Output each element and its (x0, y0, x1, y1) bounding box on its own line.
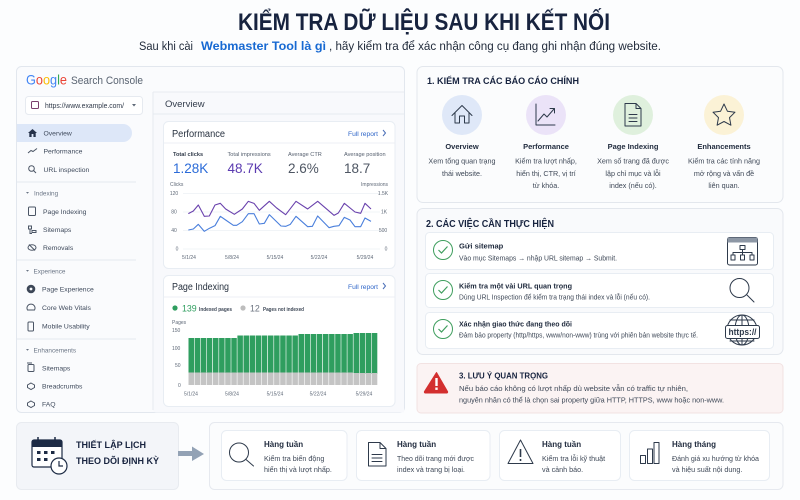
nav: sitemaps enhancement: Sitemaps (42, 366, 71, 372)
nav: URL inspection: URL inspection (44, 167, 90, 174)
property selector (26, 96, 142, 114)
nav: core web vitals (27, 304, 91, 312)
card: monthly trends: Đánh giá xu hướng từ khóa (672, 454, 759, 463)
item: overview: Overview (445, 142, 479, 151)
logo: Google Search Console (26, 72, 143, 88)
line chart: clicks and impressions: 0 (176, 246, 179, 252)
subtitle (139, 39, 661, 53)
title: KIỂM TRA DỮ LIỆU SAU KHI KẾT NỐI (238, 8, 610, 36)
nav group: experience: Experience (34, 268, 66, 276)
main area (153, 92, 404, 412)
legend: 12 (250, 304, 260, 314)
sidebar navigation (17, 124, 136, 408)
item: performance: từ khóa. (533, 181, 559, 190)
full report link: Full report (348, 284, 378, 291)
bar chart: indexed pages: 5/1/24 (184, 392, 198, 398)
card: page indexing (164, 276, 395, 406)
stat: total impressions: Total impressions (228, 152, 271, 158)
stat: average CTR: Average CTR (288, 152, 322, 158)
task: submit sitemap (426, 232, 774, 270)
heading: 2. CÁC VIỆC CẦN THỰC HIỆN (426, 217, 554, 230)
item: performance: Performance (523, 142, 569, 151)
stat: total impressions: 48.7K (228, 161, 263, 176)
line chart: clicks and impressions: 80 (171, 210, 177, 216)
icon: https globe: https:// (728, 327, 757, 337)
subtitle: Sau khi cài (139, 39, 193, 53)
line chart: clicks and impressions: 1K (381, 210, 388, 216)
legend (172, 304, 304, 314)
icon: magnifier (730, 278, 754, 302)
line chart: clicks and impressions: 5/1/24 (182, 255, 196, 261)
overview heading: Overview (165, 99, 205, 110)
item: enhancements: liên quan. (708, 181, 740, 190)
stat: average position (344, 152, 386, 176)
card: weekly technical: Hàng tuần (542, 440, 581, 449)
card: weekly technical: Kiểm tra lỗi kỹ thuật (542, 454, 605, 463)
card: performance (164, 122, 395, 268)
item: page indexing: Page Indexing (608, 142, 659, 151)
nav: page experience (27, 285, 94, 294)
nav: overview: Overview (44, 130, 72, 138)
panel: schedule callout (16, 422, 178, 490)
nav: sitemaps (28, 226, 72, 234)
line chart: clicks and impressions: 120 (170, 191, 178, 197)
panel: 3 important note: nguyên nhân có thể là chọn sai property giữa HTTP, HTTPS, www hoặc non-www. (459, 396, 724, 404)
stat: total clicks: Total clicks (173, 152, 203, 158)
card: weekly traffic: hiển thị và lượt nhấp. (264, 465, 332, 474)
nav group: enhancements: Enhancements (34, 348, 76, 354)
item: performance: hiển thị, CTR, vị trí (516, 169, 576, 178)
nav: page indexing (28, 207, 87, 216)
bar chart: indexed pages: 0 (178, 383, 181, 389)
heading: 1. KIỂM TRA CÁC BÁO CÁO CHÍNH (427, 75, 579, 87)
task: submit sitemap: Gửi sitemap (459, 242, 504, 250)
task: inspect URL: Kiểm tra một vài URL quan trọng (459, 282, 572, 290)
panel: search console mockup (16, 66, 404, 412)
stat: total clicks (173, 152, 208, 176)
line chart: clicks and impressions: 500 (379, 228, 387, 234)
task: inspect URL: Dùng URL Inspection để kiểm tra trạng thái index và lỗi (nếu có). (459, 292, 650, 302)
nav: removals: Removals (43, 245, 74, 252)
full report link (348, 283, 386, 291)
card: weekly traffic (222, 430, 347, 480)
line chart: clicks and impressions: 5/29/24 (357, 255, 374, 261)
item: enhancements (688, 95, 760, 190)
icon: https globe (726, 315, 760, 345)
icon: calendar (32, 437, 67, 474)
logo: Google Search Console: Search Console (71, 75, 143, 87)
line chart: clicks and impressions: Clicks (170, 182, 184, 188)
logo: Google Search Console: Google (26, 72, 67, 88)
stat: total clicks: 1.28K (173, 161, 208, 176)
body: Nếu báo cáo không có lượt nhấp dù website vẫn có traffic tự nhiên, (459, 384, 688, 393)
card: weekly technical (500, 430, 620, 480)
card: weekly index (356, 430, 490, 480)
icon: sitemap (728, 238, 758, 265)
nav: breadcrumbs: Breadcrumbs (42, 384, 83, 390)
task: confirm protocol: Xác nhận giao thức đang theo dõi (459, 320, 572, 328)
item: performance (515, 95, 577, 190)
item: page indexing: index (nếu có). (609, 181, 657, 190)
item: page indexing: Xem số trang đã được (597, 156, 669, 166)
item: page indexing: lập chỉ mục và lỗi (605, 169, 661, 178)
heading: 3. LƯU Ý QUAN TRỌNG (459, 370, 548, 380)
line chart: clicks and impressions: 40 (171, 228, 177, 234)
text: THIẾT LẬP LỊCH (76, 439, 146, 451)
card: weekly traffic: Hàng tuần (264, 440, 303, 449)
nav: URL inspection (29, 166, 90, 174)
nav: FAQ: FAQ (42, 402, 56, 408)
card: monthly trends: và hiệu suất nội dung. (672, 465, 742, 474)
card: weekly index: index và trang bị loại. (397, 465, 465, 474)
card: weekly technical: và cảnh báo. (542, 465, 583, 474)
nav: mobile usability (28, 322, 90, 331)
item: enhancements: Kiểm tra các tính năng (688, 156, 760, 166)
stat: average CTR: 2.6% (288, 161, 319, 176)
line chart: clicks and impressions: 5/22/24 (311, 255, 328, 261)
item: performance: Kiểm tra lượt nhấp, (515, 156, 577, 166)
nav: core web vitals: Core Web Vitals (42, 305, 91, 312)
nav: page experience: Page Experience (42, 286, 94, 294)
item: page indexing (597, 95, 669, 190)
bar chart: indexed pages: 150 (172, 328, 181, 334)
nav: FAQ (28, 401, 56, 408)
nav group: indexing: Indexing (34, 190, 59, 198)
card: page indexing: Page Indexing (172, 282, 229, 293)
icon: warning (424, 372, 448, 393)
stat: average position: 18.7 (344, 161, 370, 176)
subtitle: , hãy kiểm tra để xác nhận công cụ đang ghi nhận đúng website. (329, 39, 661, 53)
panel: 2 tasks (417, 208, 783, 354)
bar chart: indexed pages: 5/8/24 (225, 392, 239, 398)
full report link: Full report (348, 131, 378, 138)
stat: total impressions (228, 152, 271, 176)
task: submit sitemap: Vào mục Sitemaps → nhập URL sitemap → Submit. (459, 254, 617, 262)
item: overview (428, 95, 496, 178)
task: inspect URL (426, 274, 774, 308)
panel: 3 important note (417, 364, 783, 413)
task: confirm protocol: Đảm bảo property (http/https, www/non-www) trùng với phiên bản website thực tế. (459, 330, 698, 340)
line chart: clicks and impressions: 5/8/24 (225, 255, 239, 261)
line chart: clicks and impressions (170, 182, 389, 261)
line chart: clicks and impressions: 5/15/24 (267, 255, 284, 261)
nav: breadcrumbs (28, 383, 83, 390)
card: weekly index: Theo dõi trang mới được (397, 454, 474, 463)
bar chart: indexed pages: 5/22/24 (310, 392, 327, 398)
nav: overview (28, 129, 72, 138)
property selector: https://www.example.com/ (45, 101, 125, 110)
bar chart: indexed pages: 5/29/24 (356, 392, 373, 398)
bar chart: indexed pages: 50 (175, 363, 181, 369)
nav: sitemaps: Sitemaps (43, 227, 72, 234)
card: weekly traffic: Kiểm tra biến động (264, 454, 324, 463)
bar chart: indexed pages: Pages (172, 320, 187, 326)
line chart: clicks and impressions: Impressions (361, 182, 388, 188)
subtitle: Webmaster Tool là gì (201, 39, 326, 53)
item: overview: Xem tổng quan trạng (428, 156, 496, 166)
stat: average CTR (288, 152, 322, 176)
bar chart: indexed pages: 100 (172, 346, 181, 352)
task: confirm protocol (426, 312, 774, 348)
nav: sitemaps enhancement (27, 363, 71, 372)
card: performance: Performance (172, 129, 226, 140)
card: weekly index: Hàng tuần (397, 440, 436, 449)
legend: Pages not indexed (263, 307, 304, 313)
arrow (178, 446, 204, 461)
panel: 1 main reports (417, 66, 783, 202)
card: monthly trends: Hàng tháng (672, 440, 716, 449)
legend: Indexed pages (199, 307, 232, 313)
line chart: clicks and impressions: 0 (385, 246, 388, 252)
line chart: clicks and impressions: 1.5K (378, 191, 389, 197)
stat: average position: Average position (344, 152, 386, 158)
item: enhancements: mở rộng và vấn đề (694, 169, 754, 178)
item: enhancements: Enhancements (697, 142, 751, 151)
legend: 139 (182, 304, 197, 314)
nav: page indexing: Page Indexing (43, 209, 87, 216)
nav: mobile usability: Mobile Usability (42, 324, 90, 330)
card: monthly trends (630, 430, 770, 480)
panel: schedule cards (210, 422, 783, 490)
bar chart: indexed pages: 5/15/24 (267, 392, 284, 398)
panel: schedule callout: THEO DÕI ĐỊNH KỲ (76, 455, 160, 467)
nav: performance: Performance (44, 148, 83, 156)
bar chart: indexed pages (172, 320, 377, 398)
item: overview: thái website. (442, 169, 482, 178)
nav: removals (28, 244, 74, 252)
